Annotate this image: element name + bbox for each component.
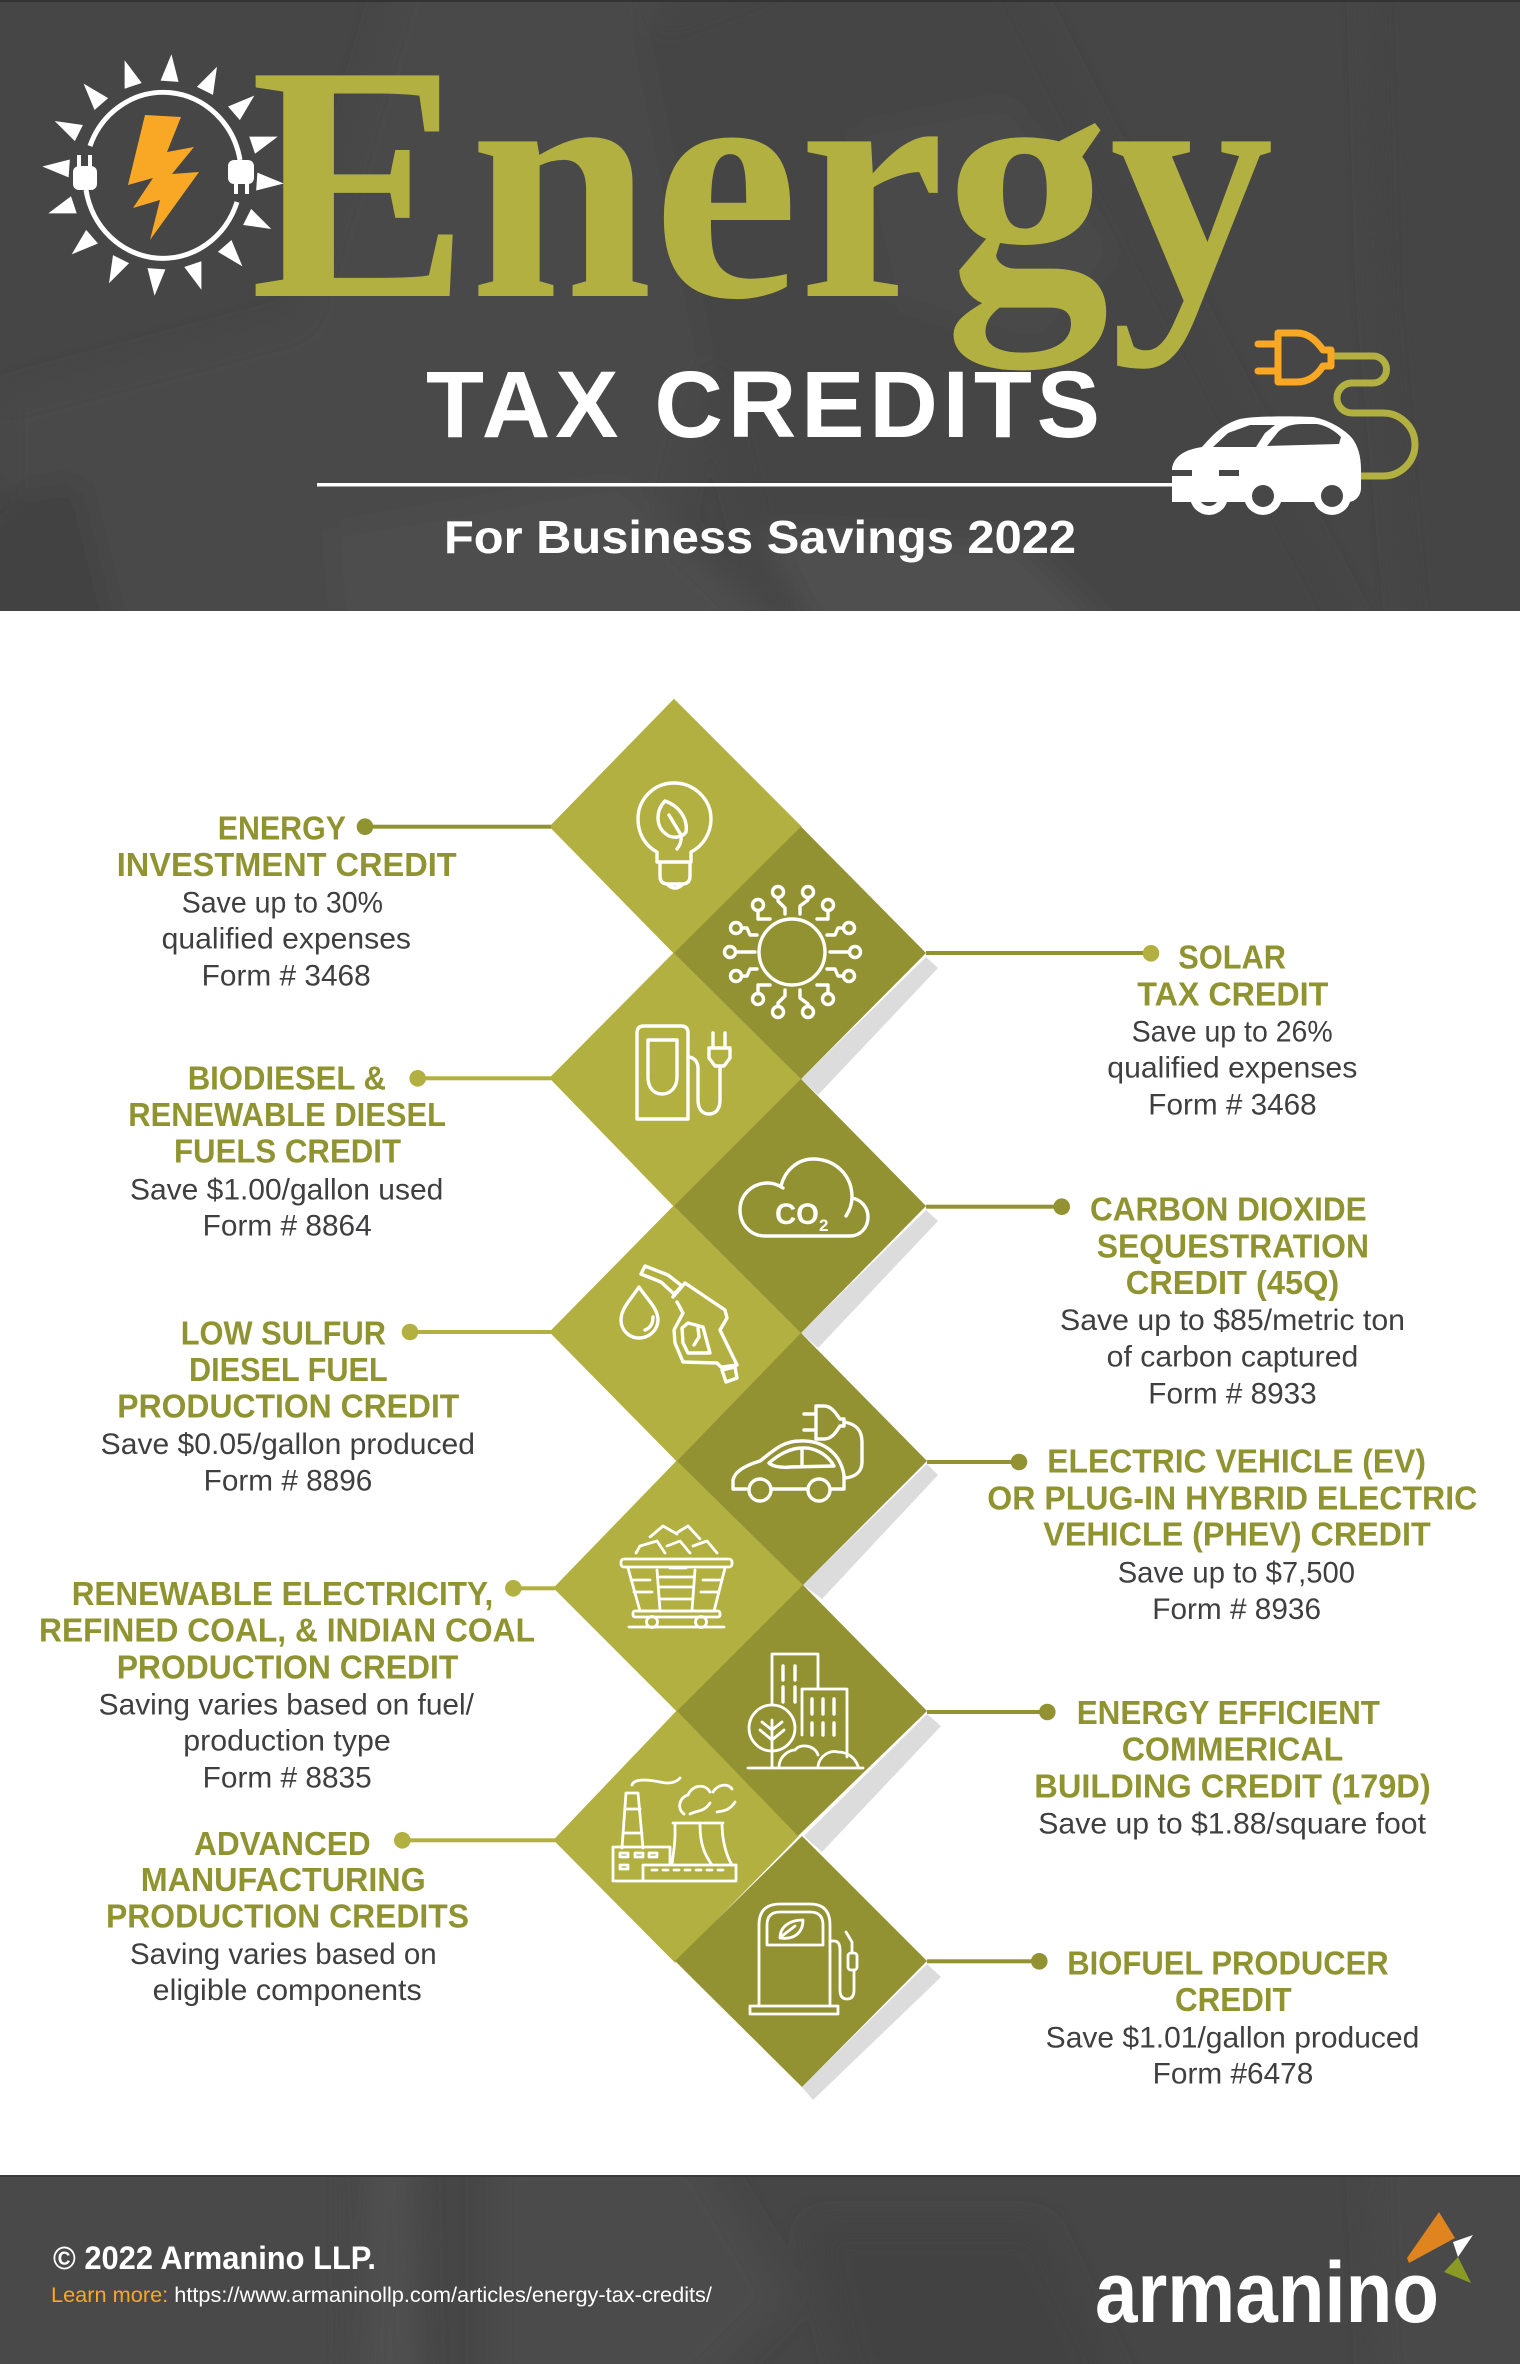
diamond: carbon dioxide — [674, 1079, 926, 1333]
diamond: low sulfur — [550, 1206, 801, 1461]
callout: renewable electricity and coal credit — [39, 1576, 555, 1795]
callout: renewable electricity and coal credit: Saving varies based on fuel/ — [99, 1688, 475, 1721]
callout: biodiesel credit: Form # 8864 — [203, 1210, 372, 1243]
connector — [926, 1198, 1070, 1215]
divider line to car — [317, 483, 1177, 486]
callout: carbon dioxide sequestration credit — [926, 1192, 1405, 1410]
callout: low sulfur diesel credit: PRODUCTION CREDIT — [117, 1388, 460, 1425]
callout: energy investment credit: INVESTMENT CREDIT — [117, 847, 457, 884]
connector — [402, 1324, 551, 1340]
callout: biodiesel credit — [128, 1060, 551, 1243]
callout: electric vehicle credit: OR PLUG-IN HYBRID ELECTRIC — [987, 1480, 1477, 1517]
icon: plug cord and electric car — [1172, 333, 1415, 515]
callout: advanced manufacturing credits: eligible components — [153, 1974, 422, 2007]
callout: biodiesel credit: RENEWABLE DIESEL — [128, 1097, 446, 1134]
callout: energy investment credit: qualified expenses — [162, 922, 411, 955]
callout: energy efficient building credit — [927, 1695, 1431, 1840]
diamond: efficient building — [677, 1585, 927, 1836]
icon: light bulb with leaf — [638, 783, 711, 888]
callout: low sulfur diesel credit: LOW SULFUR — [181, 1315, 386, 1352]
callout: electric vehicle credit: ELECTRIC VEHICLE (EV) — [1047, 1444, 1426, 1481]
diamond: biofuel producer — [675, 1836, 927, 2087]
callout: biofuel producer credit: CREDIT — [1175, 1982, 1292, 2019]
callout: carbon dioxide sequestration credit: SEQUESTRATION — [1097, 1228, 1369, 1265]
callout: advanced manufacturing credits: Saving varies based on — [130, 1938, 437, 1971]
icon: CO2 cloud: CO — [775, 1198, 819, 1231]
callout: energy investment credit: ENERGY — [218, 810, 346, 847]
panel: footer — [0, 2175, 1520, 2364]
callout: electric vehicle credit: Form # 8936 — [1152, 1593, 1321, 1626]
copyright text: © 2022 Armanino LLP. — [53, 2240, 376, 2276]
callout: renewable electricity and coal credit: production type — [183, 1725, 391, 1758]
callout: renewable electricity and coal credit: RENEWABLE ELECTRICITY, — [72, 1576, 493, 1613]
callout: energy investment credit — [117, 810, 551, 992]
icon: sun with plugs and lightning bolt — [42, 54, 284, 296]
callout: low sulfur diesel credit: Save $0.05/gallon produced — [101, 1428, 475, 1461]
callout: solar tax credit: Save up to 26% — [1132, 1016, 1333, 1049]
icon: factory with cooling towers — [613, 1778, 736, 1881]
callout: carbon dioxide sequestration credit: CARBON DIOXIDE — [1090, 1192, 1367, 1229]
connector — [505, 1580, 555, 1597]
icon: biofuel pump — [750, 1904, 857, 2014]
subtitle: For Business Savings 2022 — [444, 511, 1076, 563]
title: Energy: Energy — [250, 0, 1274, 375]
icon: CO2 cloud: 2 — [819, 1216, 828, 1235]
callout: renewable electricity and coal credit: PRODUCTION CREDIT — [117, 1649, 459, 1686]
learn more link: Learn more: https://www.armaninollp.com/articles/energy-tax-credits/ — [51, 2283, 712, 2307]
callout: energy investment credit: Form # 3468 — [202, 959, 371, 992]
callout: low sulfur diesel credit: Form # 8896 — [204, 1464, 372, 1497]
callout: energy efficient building credit: COMMERICAL — [1122, 1732, 1343, 1769]
callout: solar tax credit: SOLAR — [1178, 940, 1286, 977]
callout: carbon dioxide sequestration credit: Form # 8933 — [1148, 1377, 1317, 1410]
armanino logo: armanino — [1095, 2245, 1439, 2341]
callout: biofuel producer credit — [927, 1945, 1419, 2091]
callout: energy efficient building credit: ENERGY EFFICIENT — [1077, 1695, 1380, 1732]
callout: renewable electricity and coal credit: REFINED COAL, & INDIAN COAL — [39, 1613, 535, 1650]
diamond: energy investment — [550, 700, 801, 953]
connector — [394, 1832, 555, 1849]
diamond: renewable electricity — [554, 1461, 803, 1711]
heading: tax credits: TAX CREDITS — [426, 352, 1100, 458]
callout: energy efficient building credit: Save up to $1.88/square foot — [1038, 1807, 1426, 1840]
callout: biofuel producer credit: Save $1.01/gallon produced — [1046, 2021, 1419, 2054]
icon: coal cart — [621, 1526, 732, 1628]
panel: header — [0, 0, 1520, 640]
callout: biofuel producer credit: Form #6478 — [1153, 2058, 1313, 2091]
callout: energy investment credit: Save up to 30% — [182, 887, 383, 920]
icon: green buildings and tree — [748, 1654, 863, 1768]
callout: biofuel producer credit: BIOFUEL PRODUCER — [1067, 1945, 1389, 1982]
icon: circuit sun — [724, 886, 860, 1018]
diamond: advanced manufacturing — [554, 1711, 798, 1962]
panel: diamond chain — [550, 700, 941, 2100]
callout: low sulfur diesel credit — [101, 1315, 551, 1497]
callout: biodiesel credit: Save $1.00/gallon used — [130, 1173, 443, 1206]
callout: biodiesel credit: BIODIESEL & — [188, 1060, 386, 1097]
callout: advanced manufacturing credits: MANUFACTURING — [141, 1862, 426, 1899]
callout: solar tax credit: Form # 3468 — [1148, 1089, 1317, 1122]
connector — [357, 818, 551, 835]
icon: charging station — [637, 1026, 730, 1119]
callout: solar tax credit: TAX CREDIT — [1137, 976, 1329, 1013]
connector — [927, 1953, 1048, 1970]
callout: biodiesel credit: FUELS CREDIT — [174, 1134, 401, 1171]
icon: CO2 cloud — [740, 1159, 868, 1236]
callout: electric vehicle credit: VEHICLE (PHEV) CREDIT — [1043, 1517, 1431, 1554]
callout: carbon dioxide sequestration credit: of carbon captured — [1107, 1341, 1358, 1374]
connector — [927, 1454, 1027, 1470]
callout: solar tax credit: qualified expenses — [1107, 1052, 1357, 1085]
diamond shadows — [801, 957, 941, 2100]
callout: low sulfur diesel credit: DIESEL FUEL — [189, 1352, 388, 1389]
callout: advanced manufacturing credits — [106, 1826, 555, 2007]
diamond: solar — [674, 827, 926, 1079]
callout: advanced manufacturing credits: PRODUCTION CREDITS — [106, 1899, 469, 1936]
connector — [927, 1704, 1056, 1720]
icon: fuel nozzle and drop — [621, 1266, 737, 1382]
callout: electric vehicle credit: Save up to $7,500 — [1118, 1557, 1355, 1590]
callout: solar tax credit — [926, 940, 1357, 1122]
connector — [926, 945, 1159, 962]
callout: advanced manufacturing credits: ADVANCED — [194, 1826, 371, 1863]
diamond: biodiesel — [550, 953, 801, 1206]
diamond: electric vehicle — [677, 1333, 927, 1585]
callout: carbon dioxide sequestration credit: CREDIT (45Q) — [1126, 1265, 1339, 1302]
callout: energy efficient building credit: BUILDING CREDIT (179D) — [1034, 1768, 1431, 1805]
callout: renewable electricity and coal credit: Form # 8835 — [203, 1762, 372, 1795]
icon: electric car with plug — [733, 1406, 862, 1501]
connector — [409, 1070, 551, 1087]
callout: carbon dioxide sequestration credit: Save up to $85/metric ton — [1060, 1304, 1405, 1337]
callout: electric vehicle credit — [927, 1444, 1477, 1626]
